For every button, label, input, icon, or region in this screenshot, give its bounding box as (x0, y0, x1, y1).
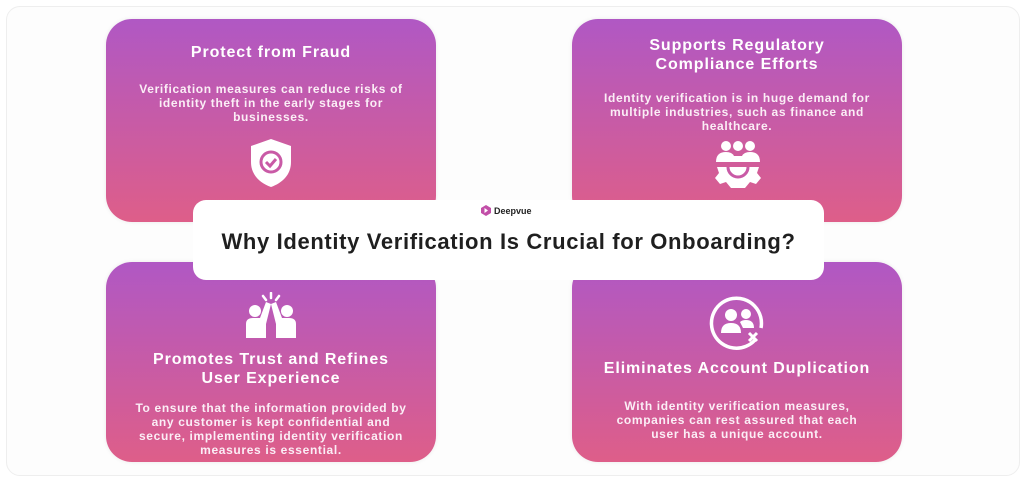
text block: Verification measures can reduce risks of (139, 82, 403, 96)
panel: account duplication (572, 262, 902, 462)
text block: identity theft in the early stages for (159, 96, 383, 110)
icon: high five (246, 292, 296, 338)
text block: secure, implementing identity verification (139, 429, 403, 443)
panel: regulatory compliance (572, 19, 902, 222)
text block: healthcare. (702, 119, 772, 133)
text block (139, 82, 403, 124)
panel: protect from fraud (106, 19, 436, 222)
heading: Compliance Efforts (656, 56, 818, 73)
text block: Identity verification is in huge demand for (604, 91, 870, 105)
text block: companies can rest assured that each (617, 413, 857, 427)
heading: Supports Regulatory (649, 37, 825, 54)
central title box (193, 200, 824, 280)
text block: To ensure that the information provided by (135, 401, 407, 415)
panel: trust and user experience (106, 262, 436, 462)
logo: Deepvue: Deepvue (494, 206, 532, 216)
icon: users with x (710, 296, 764, 350)
heading: Promotes Trust and Refines (153, 351, 389, 368)
text block: any customer is kept confidential and (152, 415, 390, 429)
text block: With identity verification measures, (624, 399, 850, 413)
text block (617, 399, 857, 441)
logo: Deepvue (481, 205, 532, 216)
icon: team gear (715, 141, 761, 188)
heading: User Experience (202, 370, 340, 387)
text block: user has a unique account. (651, 427, 823, 441)
heading: Protect from Fraud (191, 44, 351, 61)
text block: businesses. (233, 110, 309, 124)
icon: shield check (251, 139, 291, 187)
text block: measures is essential. (200, 443, 342, 457)
heading (153, 351, 389, 387)
text block (604, 91, 870, 133)
text block (135, 401, 407, 457)
heading (649, 37, 825, 73)
text block: multiple industries, such as finance and (610, 105, 864, 119)
title: Why Identity Verification Is Crucial for Onboarding? (221, 229, 796, 254)
heading: Eliminates Account Duplication (604, 360, 870, 377)
